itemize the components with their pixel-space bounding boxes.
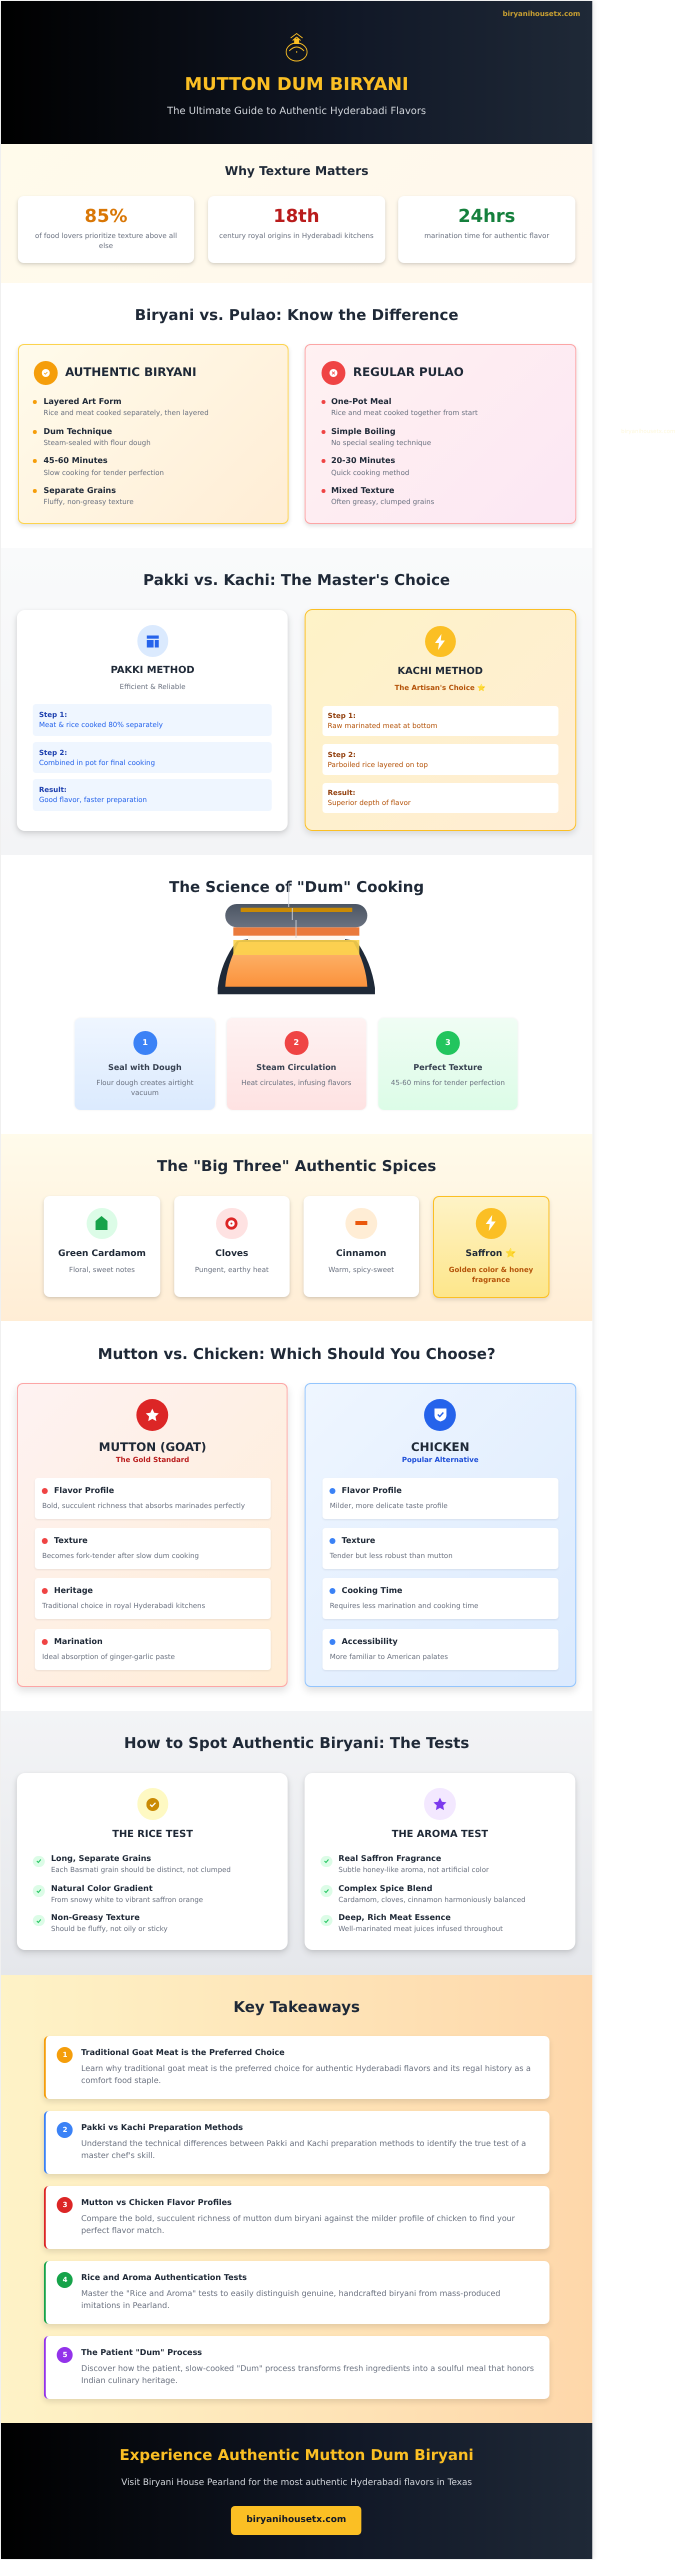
site url: biryanihousetx.com	[503, 10, 580, 18]
title: THE RICE TEST	[112, 1829, 193, 1840]
stat card: 18th	[208, 196, 385, 263]
step card: steam: Heat circulates, infusing flavors	[241, 1079, 351, 1087]
step 2: Parboiled rice layered on top	[328, 761, 428, 769]
step card: texture: 3	[445, 1038, 451, 1047]
icon: bolt	[425, 626, 456, 657]
result: Good flavor, faster preparation	[39, 796, 147, 804]
card: regular pulao: Often greasy, clumped grains	[331, 498, 434, 506]
panel: footer call to action	[1, 2422, 592, 2558]
takeaway 4	[44, 2261, 549, 2324]
heading: The Science of "Dum" Cooking	[169, 878, 424, 896]
panel: biryani vs pulao	[1, 282, 592, 548]
spice card: cardamom	[44, 1196, 160, 1297]
takeaway 2: Pakki vs Kachi Preparation Methods	[81, 2123, 243, 2132]
spice card: saffron: fragrance	[472, 1276, 510, 1284]
result	[322, 783, 558, 813]
panel: big three spices	[1, 1134, 592, 1321]
spice card: saffron: Golden color & honey	[449, 1266, 533, 1274]
takeaway 3: 3	[63, 2201, 68, 2209]
takeaway 1: Learn why traditional goat meat is the preferred choice for authentic Hyderabadi flavors and its regal history as a	[81, 2064, 531, 2073]
card title: AUTHENTIC BIRYANI	[65, 365, 196, 379]
stat card: 24hrs: marination time for authentic flavor	[424, 232, 549, 240]
spice card: cardamom: Green Cardamom	[58, 1249, 146, 1259]
step 2: Step 2:	[328, 751, 356, 759]
panel: authenticity tests	[1, 1711, 592, 1974]
takeaway 1: 1	[63, 2051, 68, 2059]
spice card: cloves: Cloves	[215, 1249, 248, 1259]
step card: steam	[227, 1018, 366, 1110]
card: mutton	[17, 1383, 288, 1687]
panel: key takeaways	[1, 1974, 592, 2422]
panel: why texture matters	[1, 144, 592, 282]
step 2: Combined in pot for final cooking	[39, 759, 155, 767]
step 1: Step 1:	[39, 711, 67, 719]
icon: check	[34, 361, 57, 385]
check rows	[33, 1856, 44, 1867]
row: flavor	[322, 1478, 558, 1519]
heading: The "Big Three" Authentic Spices	[157, 1157, 436, 1175]
row: flavor	[34, 1478, 271, 1519]
row: marination	[34, 1629, 271, 1670]
step card: steam: 2	[294, 1038, 299, 1047]
card: regular pulao: Mixed Texture	[331, 486, 394, 495]
card: regular pulao: One-Pot Meal	[331, 397, 392, 406]
card: rice test: Long, Separate Grains	[51, 1854, 151, 1863]
takeaway 4: Rice and Aroma Authentication Tests	[81, 2273, 247, 2282]
card: aroma test: Cardamom, cloves, cinnamon harmoniously balanced	[338, 1896, 526, 1904]
takeaway 4: 4	[63, 2276, 68, 2284]
card: regular pulao: 20-30 Minutes	[331, 456, 395, 465]
takeaway 3: Mutton vs Chicken Flavor Profiles	[81, 2198, 232, 2207]
result	[33, 779, 272, 811]
card: authentic biryani: Separate Grains	[43, 486, 116, 495]
row: marination: Marination	[54, 1637, 103, 1646]
takeaway 5: The Patient "Dum" Process	[81, 2348, 202, 2357]
method title: PAKKI METHOD	[111, 665, 195, 676]
step 1: Step 1:	[328, 712, 356, 720]
spice card: cardamom: Floral, sweet notes	[69, 1266, 135, 1274]
subtitle: The Gold Standard	[116, 1456, 189, 1464]
row: texture: Becomes fork-tender after slow dum cooking	[42, 1552, 199, 1560]
step 1: Raw marinated meat at bottom	[328, 722, 437, 730]
card: aroma test: Subtle honey-like aroma, not artificial color	[338, 1866, 489, 1874]
row: cooking time	[322, 1578, 558, 1619]
icon: star	[424, 1788, 456, 1820]
card: aroma test: Well-marinated meat juices infused throughout	[338, 1925, 503, 1933]
stat card: 85%	[18, 196, 194, 263]
step card: seal: vacuum	[131, 1089, 159, 1097]
card: rice test: From snowy white to vibrant saffron orange	[51, 1896, 203, 1904]
spice card: cinnamon: Cinnamon	[336, 1249, 386, 1259]
icon: layout	[137, 625, 168, 657]
takeaway 2	[44, 2111, 549, 2174]
takeaway 2: 2	[63, 2126, 68, 2134]
spice card: cinnamon	[303, 1196, 419, 1297]
footer heading: Experience Authentic Mutton Dum Biryani	[120, 2446, 474, 2464]
card: kachi method	[305, 609, 576, 831]
card: regular pulao: Simple Boiling	[331, 427, 396, 436]
takeaway 3	[44, 2186, 549, 2249]
row: accessibility	[322, 1629, 558, 1670]
panel: pakki vs kachi	[1, 548, 592, 854]
card: regular pulao: Quick cooking method	[331, 469, 409, 477]
icon: star	[137, 1399, 169, 1431]
stat card: 18th: century royal origins in Hyderabadi kitchens	[219, 232, 374, 240]
button	[231, 2506, 361, 2535]
method title: KACHI METHOD	[398, 666, 483, 677]
card: authentic biryani: Dum Technique	[43, 427, 112, 436]
row: texture	[322, 1528, 558, 1569]
spice card: saffron	[433, 1196, 549, 1298]
card: authentic biryani: Rice and meat cooked separately, then layered	[43, 409, 209, 417]
icon: shield	[424, 1399, 456, 1431]
check rows	[321, 1856, 332, 1867]
stat card: 24hrs	[398, 196, 575, 263]
card: aroma test: Real Saffron Fragrance	[338, 1854, 441, 1863]
step card: texture	[378, 1018, 518, 1110]
row: flavor: Milder, more delicate taste profile	[330, 1502, 448, 1510]
card: regular pulao: Rice and meat cooked together from start	[331, 409, 478, 417]
takeaway 1	[44, 2036, 549, 2099]
row: heritage: Traditional choice in royal Hyderabadi kitchens	[42, 1602, 205, 1610]
stat card: 18th: 18th	[273, 206, 320, 227]
takeaway 1: comfort food staple.	[81, 2076, 161, 2085]
card: rice test: Each Basmati grain should be distinct, not clumped	[51, 1866, 231, 1874]
card: regular pulao	[305, 344, 576, 524]
card: authentic biryani: Fluffy, non-greasy texture	[43, 498, 134, 506]
step card: texture: Perfect Texture	[413, 1063, 482, 1072]
takeaway 2: master chef's skill.	[81, 2151, 155, 2160]
result: Result:	[39, 786, 67, 794]
card title: REGULAR PULAO	[353, 365, 464, 379]
card: authentic biryani: Layered Art Form	[43, 397, 122, 406]
row: accessibility: More familiar to American palates	[330, 1653, 448, 1661]
heading: Biryani vs. Pulao: Know the Difference	[135, 306, 458, 324]
card: rice test	[17, 1773, 288, 1950]
spice card: cloves	[174, 1196, 290, 1297]
spice card: cloves: Pungent, earthy heat	[195, 1266, 269, 1274]
takeaway 4: Master the "Rice and Aroma" tests to easily distinguish genuine, handcrafted biryani from mass-produced	[81, 2289, 500, 2298]
panel: header	[1, 1, 592, 144]
card: authentic biryani: 45-60 Minutes	[43, 456, 108, 465]
row: texture: Tender but less robust than mutton	[330, 1552, 453, 1560]
takeaway 3: perfect flavor match.	[81, 2226, 164, 2235]
button: biryanihousetx.com	[246, 2515, 346, 2525]
card: rice test: Natural Color Gradient	[51, 1884, 153, 1893]
result: Result:	[328, 789, 355, 797]
result: Superior depth of flavor	[328, 799, 411, 807]
row: texture: Texture	[342, 1536, 375, 1545]
card: authentic biryani	[18, 344, 288, 524]
card: aroma test	[305, 1773, 575, 1950]
row: heritage	[34, 1578, 271, 1619]
icon: badge check	[137, 1788, 168, 1820]
step 1	[33, 704, 272, 736]
method subtitle: Efficient & Reliable	[120, 683, 186, 691]
card: chicken	[305, 1383, 576, 1687]
heading: Pakki vs. Kachi: The Master's Choice	[143, 571, 450, 589]
row: flavor: Flavor Profile	[54, 1486, 114, 1495]
card: authentic biryani: Steam-sealed with flour dough	[43, 439, 151, 447]
footer text: Visit Biryani House Pearland for the most authentic Hyderabadi flavors in Texas	[121, 2478, 472, 2488]
card: aroma test: Deep, Rich Meat Essence	[338, 1913, 451, 1922]
card: aroma test: Complex Spice Blend	[338, 1884, 432, 1893]
subtitle: The Ultimate Guide to Authentic Hyderabadi Flavors	[167, 106, 426, 117]
subtitle: Popular Alternative	[402, 1456, 479, 1464]
takeaway 5: Discover how the patient, slow-cooked "Dum" process transforms fresh ingredients into a soulful meal that honors	[81, 2364, 534, 2373]
heading: Why Texture Matters	[225, 164, 369, 178]
card: pakki method	[17, 610, 288, 831]
takeaway 3: Compare the bold, succulent richness of mutton dum biryani against the milder profile of chicken to find your	[81, 2214, 515, 2223]
row: flavor: Flavor Profile	[342, 1486, 402, 1495]
takeaway 5: Indian culinary heritage.	[81, 2376, 178, 2385]
illustration: dum pot	[218, 883, 375, 994]
title: CHICKEN	[411, 1440, 469, 1454]
row: heritage: Heritage	[54, 1586, 93, 1595]
takeaway 5	[44, 2336, 549, 2399]
spice card: cinnamon: Warm, spicy-sweet	[328, 1266, 394, 1274]
title: MUTTON (GOAT)	[99, 1440, 206, 1454]
step card: texture: 45-60 mins for tender perfection	[391, 1079, 505, 1087]
step 1	[322, 706, 558, 736]
step 1: Meat & rice cooked 80% separately	[39, 721, 163, 729]
spice card: saffron: Saffron ⭐	[466, 1249, 517, 1259]
watermark text: biryanihousetx.com	[621, 429, 675, 435]
stat card: 85%: of food lovers prioritize texture above all	[35, 232, 177, 240]
panel: mutton vs chicken	[1, 1321, 592, 1711]
title: THE AROMA TEST	[392, 1829, 488, 1840]
heading: Key Takeaways	[233, 1998, 360, 2016]
heading: Mutton vs. Chicken: Which Should You Choose?	[98, 1345, 496, 1363]
step 2: Step 2:	[39, 749, 67, 757]
stat card: 24hrs: 24hrs	[458, 206, 515, 227]
method subtitle: The Artisan's Choice ⭐	[395, 684, 486, 692]
card: authentic biryani: Slow cooking for tender perfection	[43, 469, 164, 477]
row: marination: Ideal absorption of ginger-garlic paste	[42, 1653, 175, 1661]
stat card: 85%: 85%	[85, 206, 127, 227]
takeaway 2: Understand the technical differences between Pakki and Kachi preparation methods to identify the true test of a	[81, 2139, 526, 2148]
panel: science of dum	[1, 854, 592, 1134]
main title: MUTTON DUM BIRYANI	[185, 75, 409, 95]
row: flavor: Bold, succulent richness that absorbs marinades perfectly	[42, 1502, 245, 1510]
takeaway 5: 5	[63, 2351, 68, 2359]
stat card: 85%: else	[99, 242, 113, 250]
icon: cross	[321, 361, 345, 385]
step 2	[322, 744, 558, 775]
card: regular pulao: No special sealing technique	[331, 439, 431, 447]
heading: How to Spot Authentic Biryani: The Tests	[124, 1734, 469, 1752]
step card: steam: Steam Circulation	[256, 1063, 336, 1072]
step card: seal: 1	[142, 1038, 148, 1047]
step card: seal	[75, 1018, 215, 1110]
step card: seal: Flour dough creates airtight	[96, 1079, 193, 1087]
takeaway 1: Traditional Goat Meat is the Preferred Choice	[81, 2048, 285, 2057]
row: accessibility: Accessibility	[342, 1637, 398, 1646]
row: cooking time: Requires less marination and cooking time	[330, 1602, 478, 1610]
row: texture: Texture	[54, 1536, 88, 1545]
takeaway 4: imitations in Pearland.	[81, 2301, 170, 2310]
step card: seal: Seal with Dough	[108, 1063, 182, 1072]
icon: biryani pot	[286, 33, 308, 62]
row: cooking time: Cooking Time	[342, 1586, 402, 1595]
row: texture	[34, 1528, 271, 1569]
card: rice test: Should be fluffy, not oily or sticky	[51, 1925, 168, 1933]
step 2	[33, 742, 272, 773]
card: rice test: Non-Greasy Texture	[51, 1913, 140, 1922]
